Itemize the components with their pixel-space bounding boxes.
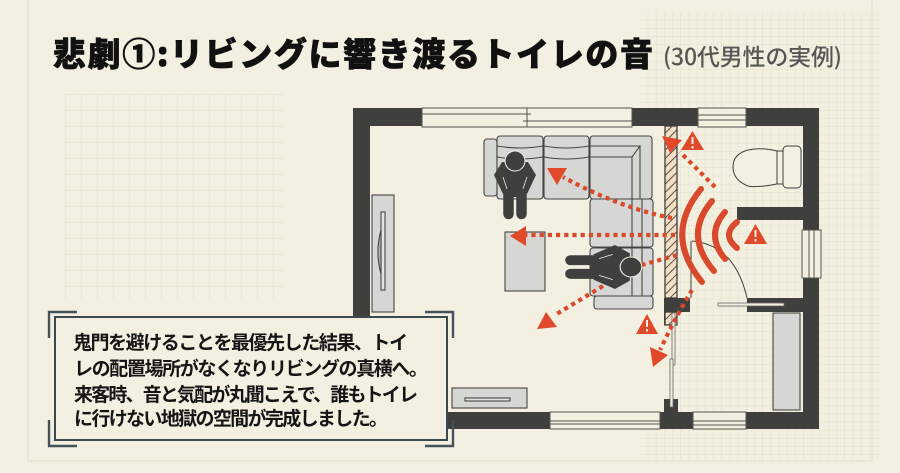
arrowheads (510, 136, 682, 367)
arrow to wall top (680, 152, 715, 187)
callout text: 来客時、音と気配が丸聞こえで、誰もトイレ (74, 380, 418, 407)
TV stand bottom (452, 388, 527, 408)
partition hatched wall (665, 126, 677, 325)
arrow to lower left (555, 286, 603, 315)
callout box (49, 312, 453, 446)
corner brackets (49, 312, 453, 446)
walls (353, 108, 819, 429)
coffee table (505, 232, 545, 291)
person on sofa (494, 151, 536, 214)
sliding doors (670, 303, 784, 407)
arrow down (660, 290, 692, 350)
sound waves (682, 189, 737, 282)
callout text: 鬼門を避けることを最優先した結果、トイ (73, 328, 408, 355)
callout text (73, 328, 428, 431)
windows (422, 108, 821, 429)
storage cabinet (773, 313, 800, 410)
arrow to seated person (642, 255, 677, 265)
title: 悲劇①:リビングに響き渡るトイレの音 (53, 28, 653, 76)
sound arrows (526, 152, 715, 350)
person on chaise (571, 245, 642, 289)
warning icon lower (636, 314, 658, 334)
warning icon top (681, 131, 704, 150)
warning icon right (744, 224, 767, 244)
callout text: レの配置場所がなくなりリビングの真横へ。 (74, 354, 428, 381)
TV stand left (372, 195, 394, 312)
callout text: に行けない地獄の空間が完成しました。 (74, 404, 388, 431)
arrow to table (526, 233, 675, 237)
toilet (733, 146, 801, 188)
floor plan (353, 108, 821, 429)
subtitle: (30代男性の実例) (663, 38, 842, 72)
arrow to sofa person (563, 177, 672, 218)
sofa (484, 136, 653, 309)
toilet door swing (691, 241, 747, 298)
